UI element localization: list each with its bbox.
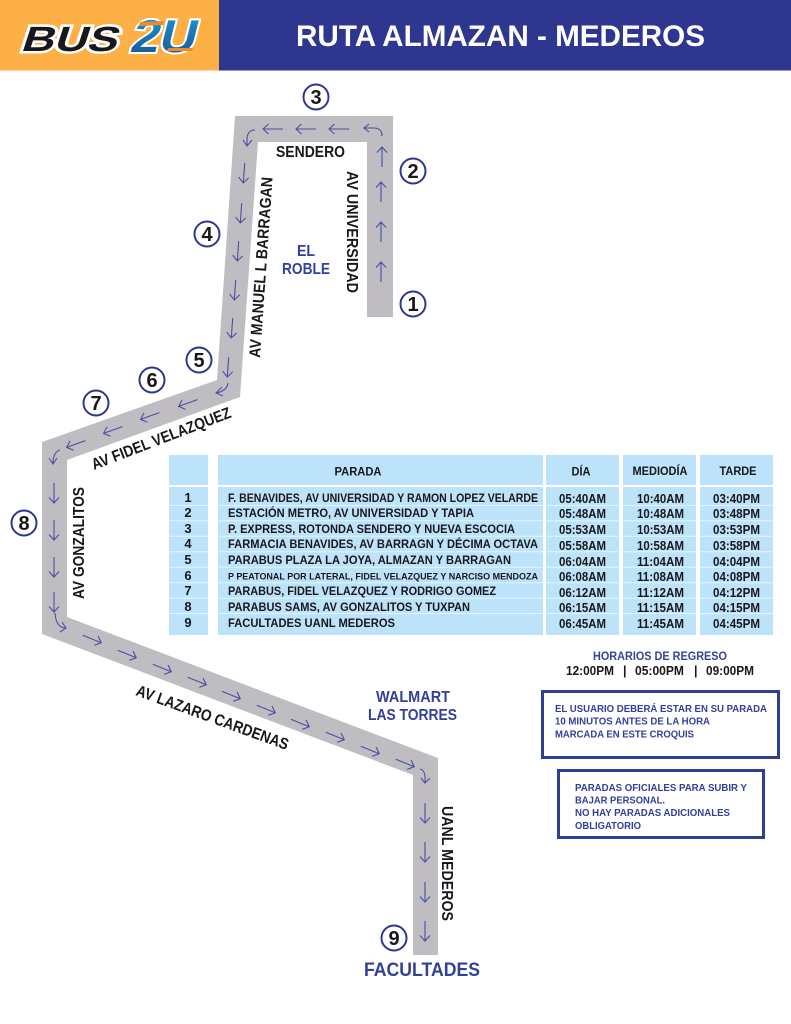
stop marker 1: 1 [407, 294, 419, 316]
row 6: P PEATONAL POR LATERAL, FIDEL VELAZQUEZ Y NARCISO MENDOZA [228, 572, 538, 582]
row 9: 9 [184, 615, 192, 630]
callout: arrival notice: 10 MINUTOS ANTES DE LA HORA [555, 716, 710, 728]
row 1: 1 [184, 490, 192, 505]
street label: Sendero: SENDERO [276, 144, 345, 161]
place label: Walmart Las Torres [368, 689, 457, 724]
stop marker 3 [304, 84, 328, 110]
row 2: 10:48AM [637, 507, 684, 521]
row 3 [184, 521, 760, 537]
return schedule [566, 649, 754, 678]
callout: arrival notice [542, 692, 778, 758]
row 5: 5 [184, 552, 192, 567]
row 1: 10:40AM [637, 492, 684, 506]
return times: 09:00PM [706, 664, 754, 678]
stop marker 5 [186, 348, 212, 372]
row 6: 6 [184, 568, 192, 583]
stop marker 4 [194, 222, 220, 246]
logo: BUS: BUS [17, 19, 126, 59]
row 6: 06:08AM [559, 570, 606, 584]
row 1: 03:40PM [713, 492, 760, 506]
table header row: DÍA [572, 464, 591, 478]
row 9 [184, 615, 760, 631]
row 3: 03:53PM [713, 523, 760, 537]
row 7 [184, 583, 760, 600]
row 4: 4 [184, 536, 192, 551]
street label: Av Gonzalitos: AV GONZALITOS [71, 487, 88, 599]
stop marker 9: 9 [388, 928, 400, 950]
return times: | [623, 664, 626, 678]
place label: El Roble [282, 243, 330, 278]
row 7: 06:12AM [559, 586, 606, 600]
stop marker 8 [12, 510, 36, 536]
street label: UANL Mederos: UANL MEDEROS [438, 806, 455, 921]
row 5: 06:04AM [559, 555, 606, 569]
return times: 12:00PM [566, 664, 614, 678]
row 5: 11:04AM [637, 555, 684, 569]
stop marker 1 [400, 292, 426, 316]
stop marker 7 [84, 390, 108, 416]
row 8: 04:15PM [713, 601, 760, 615]
street label: Av Fidel Velazquez: AV FIDEL VELAZQUEZ [89, 405, 234, 474]
row 4: 05:58AM [559, 539, 606, 553]
row 5: PARABUS PLAZA LA JOYA, ALMAZAN Y BARRAGAN [228, 555, 511, 567]
route direction arrows [49, 124, 430, 941]
callout: official stops notice: PARADAS OFICIALES PARA SUBIR Y [575, 782, 747, 794]
row 4: FARMACIA BENAVIDES, AV BARRAGN Y DÉCIMA OCTAVA [228, 538, 538, 551]
row 9: FACULTADES UANL MEDEROS [228, 618, 395, 630]
stop marker 4: 4 [201, 224, 213, 246]
row 1 [184, 490, 760, 506]
row 2: 03:48PM [713, 507, 760, 521]
row 9: 11:45AM [637, 617, 684, 631]
table header row: TARDE [720, 464, 756, 478]
row 5: 04:04PM [713, 555, 760, 569]
row 3: 05:53AM [559, 523, 606, 537]
row 5 [184, 552, 760, 569]
place label: El Roble: ROBLE [282, 261, 330, 278]
stop marker 8: 8 [18, 513, 30, 535]
route map [12, 84, 480, 981]
row 7: 7 [184, 583, 192, 598]
callout: official stops notice: BAJAR PERSONAL. [575, 794, 665, 806]
row 8: 8 [184, 599, 192, 614]
stop marker 3: 3 [310, 87, 322, 109]
row 8: 11:15AM [637, 601, 684, 615]
row 1: 05:40AM [559, 492, 606, 506]
row 9: 06:45AM [559, 617, 606, 631]
street label: Av Universidad: AV UNIVERSIDAD [343, 171, 360, 293]
row 3: P. EXPRESS, ROTONDA SENDERO Y NUEVA ESCOCIA [228, 524, 515, 536]
callout: arrival notice: EL USUARIO DEBERÁ ESTAR EN SU PARADA [555, 702, 767, 715]
stop marker 9 [382, 926, 406, 950]
return times [566, 664, 754, 678]
row 6: 04:08PM [713, 570, 760, 584]
title bar [219, 0, 791, 70]
row 1: F. BENAVIDES, AV UNIVERSIDAD Y RAMON LOPEZ VELARDE [228, 493, 538, 505]
row 3: 10:53AM [637, 523, 684, 537]
callout: official stops notice: OBLIGATORIO [575, 820, 641, 832]
row 2: 05:48AM [559, 507, 606, 521]
place label: El Roble: EL [297, 243, 315, 260]
callout: official stops notice [558, 770, 764, 838]
row 4 [184, 536, 760, 553]
stop marker 6: 6 [146, 370, 158, 392]
stop marker 2 [400, 158, 426, 184]
table header row: PARADA [334, 464, 382, 478]
logo: 2U: 2U [127, 11, 204, 62]
place label: Walmart Las Torres: WALMART [376, 689, 450, 706]
row 4: 10:58AM [637, 539, 684, 553]
return times: | [694, 664, 698, 678]
schedule table [169, 455, 773, 635]
row 2: 2 [184, 505, 192, 520]
return times: 05:00PM [635, 664, 684, 678]
title: RUTA ALMAZAN - MEDEROS [296, 20, 705, 53]
stop marker 5: 5 [193, 350, 205, 372]
row 2: ESTACIÓN METRO, AV UNIVERSIDAD Y TAPIA [228, 507, 474, 520]
row 8 [184, 599, 760, 615]
table header row: MEDIODÍA [632, 463, 688, 478]
table header row [169, 455, 773, 485]
row 8: PARABUS SAMS, AV GONZALITOS Y TUXPAN [228, 602, 470, 614]
header band [0, 0, 791, 70]
row 6 [184, 568, 760, 584]
place label: Walmart Las Torres: LAS TORRES [368, 707, 457, 724]
callout: arrival notice: MARCADA EN ESTE CROQUIS [555, 728, 694, 740]
stop marker 6 [140, 368, 164, 392]
place label: Facultades: FACULTADES [364, 960, 480, 981]
street label: Av Lazaro Cardenas: AV LAZARO CARDENAS [134, 683, 291, 754]
row 4: 03:58PM [713, 539, 760, 553]
row 8: 06:15AM [559, 601, 606, 615]
callout: official stops notice: NO HAY PARADAS ADICIONALES [575, 807, 730, 819]
stop marker 2: 2 [407, 161, 419, 183]
row 3: 3 [184, 521, 192, 536]
table body background [169, 487, 773, 635]
stop marker 7: 7 [90, 393, 102, 415]
row 7: 11:12AM [637, 586, 684, 600]
row 6: 11:08AM [637, 570, 684, 584]
row 7: PARABUS, FIDEL VELAZQUEZ Y RODRIGO GOMEZ [228, 586, 496, 598]
route road [42, 116, 438, 955]
return schedule heading: HORARIOS DE REGRESO [593, 649, 727, 663]
logo panel [0, 0, 219, 70]
row 9: 04:45PM [713, 617, 760, 631]
row 7: 04:12PM [713, 586, 760, 600]
street label: Av Manuel L Barragan: AV MANUEL L BARRAGAN [247, 177, 277, 358]
row 2 [184, 505, 760, 521]
